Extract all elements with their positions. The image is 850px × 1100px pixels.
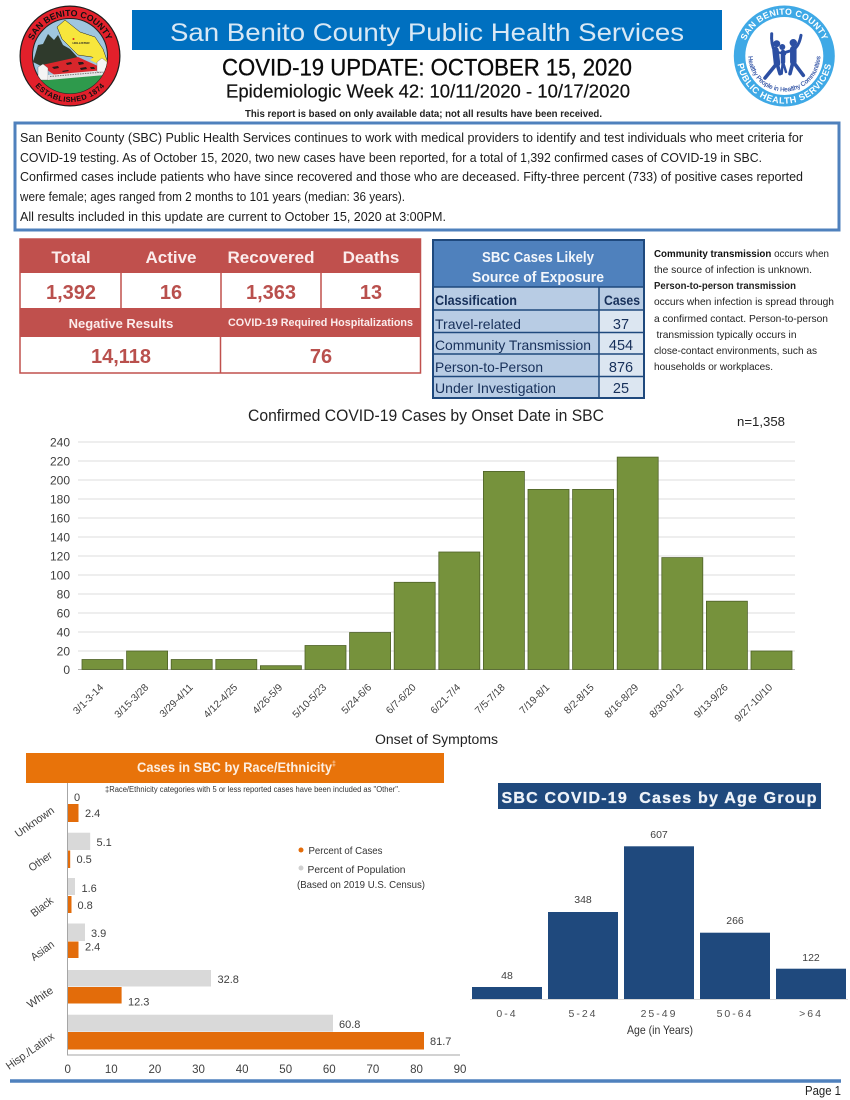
date labels: 9/27-10/10: [733, 682, 775, 725]
table: case totals: 14,118: [91, 346, 151, 368]
axes: [68, 783, 460, 1055]
age labels: >64: [799, 1008, 823, 1020]
date labels: 4/12-4/25: [202, 682, 240, 721]
panel: summary text: COVID-19 testing. As of October 15, 2020, two new cases have been reported, for a total of 1,392 confirmed cases of COVID-19 in SBC.: [20, 150, 762, 165]
axis title: Age (in Years): [627, 1023, 693, 1037]
category labels: White: [25, 985, 56, 1011]
gridlines and y axis labels: 0: [63, 663, 70, 677]
table: likely source of exposure: Cases: [604, 292, 640, 308]
chart header: ‡: [332, 761, 336, 768]
gridlines and y axis labels: 240: [50, 436, 70, 450]
chart: cases by age group: [470, 783, 848, 1037]
x axis ticks: 70: [367, 1064, 379, 1076]
x axis ticks: 50: [279, 1064, 292, 1076]
page number: Page 1: [805, 1084, 841, 1098]
table: likely source of exposure: Travel-related: [435, 316, 521, 332]
value labels: 32.8: [218, 974, 239, 986]
age labels: [496, 1008, 823, 1020]
gridlines and y axis labels: 40: [57, 626, 70, 640]
date labels: 3/1-3-14: [72, 682, 106, 717]
table: case totals: Negative Results: [69, 316, 173, 331]
value labels: 2.4: [85, 808, 100, 820]
table: likely source of exposure: Source of Exposure: [472, 270, 604, 286]
value labels: 48: [501, 970, 513, 982]
date labels: 3/15-3/28: [113, 682, 151, 721]
category labels: Hisp./Latinx: [4, 1030, 57, 1073]
table: case totals: 76: [310, 346, 332, 368]
x axis ticks: 80: [410, 1064, 423, 1076]
gridlines and y axis labels: [50, 436, 795, 677]
table: likely source of exposure: SBC Cases Likely: [482, 250, 594, 266]
text block: transmission definitions: close-contact environments, such as: [654, 345, 817, 357]
table: likely source of exposure: 876: [609, 360, 633, 376]
title: COVID-19 update date: COVID-19 UPDATE: OCTOBER 15, 2020: [222, 54, 632, 82]
gridlines and y axis labels: 20: [57, 644, 70, 658]
legend: (Based on 2019 U.S. Census): [297, 879, 425, 891]
table: case totals: COVID-19 Required Hospitalizations: [228, 317, 413, 329]
date labels: 6/7-6/20: [384, 682, 419, 717]
legend: Percent of Population: [308, 864, 406, 876]
chart title: Confirmed COVID-19 Cases by Onset Date in SBC: [248, 407, 604, 425]
text block: transmission definitions: Person-to-person transmission: [654, 280, 796, 292]
table: likely source of exposure: Person-to-Person: [435, 359, 543, 375]
date labels: 8/2-8/15: [562, 682, 597, 717]
icon: San Benito County seal: [20, 6, 120, 106]
table: likely source of exposure: 454: [609, 338, 633, 354]
value labels: 607: [650, 829, 668, 841]
age labels: 50-64: [717, 1008, 753, 1020]
text block: transmission definitions: households or workplaces.: [654, 361, 773, 373]
value labels: 5.1: [96, 837, 112, 849]
panel: summary text: [15, 123, 839, 230]
x axis ticks: 30: [192, 1064, 205, 1076]
gridlines and y axis labels: 140: [50, 530, 70, 544]
date labels: 9/13-9/26: [692, 682, 731, 721]
table: case totals: 1,392: [46, 282, 96, 304]
bars: [472, 846, 846, 999]
table: likely source of exposure: 37: [613, 317, 629, 333]
icon: Public Health Services logo: Healthy People in Healthy Communities: [748, 56, 820, 92]
date labels: 7/19-8/1: [518, 682, 552, 717]
date labels: 8/16-8/29: [603, 682, 641, 721]
gridlines and y axis labels: 100: [50, 568, 70, 582]
age labels: 5-24: [568, 1008, 598, 1020]
table: case totals: Deaths: [343, 248, 399, 267]
footnote: ‡Race/Ethnicity categories with 5 or less reported cases have been included as "Other".: [105, 785, 400, 794]
table: case totals: 16: [160, 282, 182, 304]
gridlines and y axis labels: 220: [50, 454, 70, 468]
table: case totals: Recovered: [228, 248, 314, 267]
axis title: Onset of Symptoms: [375, 732, 498, 747]
gridlines and y axis labels: 200: [50, 474, 70, 488]
category labels: Asian: [29, 939, 57, 964]
table: likely source of exposure: Under Investigation: [435, 380, 556, 396]
chart header: Cases in SBC by Race/Ethnicity: [137, 759, 332, 775]
panel: summary text: All results included in this update are current to October 15, 2020 at 3:00PM.: [20, 209, 446, 224]
text block: transmission definitions: occurs when infection is spread through: [654, 296, 834, 308]
value labels: 81.7: [430, 1036, 451, 1048]
icon: San Benito County seal: SAN BENITO COUNTY: [28, 10, 112, 40]
value labels: 2.4: [85, 942, 100, 954]
gridlines and y axis labels: 180: [50, 492, 70, 506]
panel: summary text: were female; ages ranged from 2 months to 101 years (median: 36 years).: [19, 189, 405, 204]
text block: transmission definitions: [654, 248, 834, 373]
value labels: 12.3: [128, 996, 149, 1008]
age labels: 0-4: [496, 1008, 518, 1020]
x axis ticks: 60: [323, 1064, 336, 1076]
x axis ticks: 40: [236, 1064, 248, 1076]
date labels: 5/24-6/6: [340, 682, 374, 717]
panel: summary text: San Benito County (SBC) Public Health Services continues to work with medical providers to identify and test individuals who meet criteria for: [20, 130, 804, 145]
icon: San Benito County seal: HOLLISTER: [72, 41, 90, 45]
category labels: [4, 805, 57, 1073]
icon: San Benito County seal: ESTABLISHED 1874: [35, 82, 104, 102]
category labels: Unknown: [13, 805, 57, 840]
table: likely source of exposure: [433, 240, 644, 398]
note: data availability: This report is based on only available data; not all results have been received.: [245, 109, 602, 120]
x axis ticks: 0: [64, 1064, 71, 1076]
icon: Public Health Services logo: [734, 6, 835, 106]
date labels: 5/10-5/23: [291, 682, 329, 721]
chart: confirmed cases by onset date: [50, 407, 795, 747]
sample size: n=1,358: [737, 414, 785, 429]
date labels: 4/26-5/9: [251, 682, 285, 717]
table: likely source of exposure: 25: [613, 381, 629, 397]
chart: cases by race and ethnicity: [4, 753, 466, 1076]
table: likely source of exposure: Community Transmission: [435, 337, 591, 353]
table: case totals: 1,363: [246, 282, 296, 304]
value labels: 60.8: [339, 1019, 360, 1031]
banner: department title: San Benito County Public Health Services: [170, 19, 684, 47]
gridlines and y axis labels: 80: [57, 588, 70, 602]
table: likely source of exposure: Classification: [435, 292, 517, 308]
chart header: [26, 753, 444, 783]
panel: summary text: Confirmed cases include patients who have since recovered and those who are deceased. Fifty-three percent (733) of positive cases reported: [20, 169, 803, 184]
date labels: [72, 682, 775, 725]
case bars: [68, 804, 424, 1050]
value labels: 3.9: [91, 928, 106, 940]
text block: transmission definitions: transmission typically occurs in: [656, 329, 797, 341]
chart header: SBC COVID-19 Cases by Age Group: [502, 790, 817, 807]
legend: Percent of Cases: [308, 845, 382, 857]
population bars: [68, 833, 333, 1032]
date labels: 8/30-9/12: [648, 682, 686, 721]
value labels: 122: [802, 952, 820, 964]
category labels: Other: [27, 849, 55, 874]
table: case totals: Total: [51, 248, 91, 267]
table: case totals: [20, 239, 420, 373]
date labels: 6/21-7/4: [429, 682, 463, 717]
value labels: 266: [726, 915, 744, 927]
value labels: 348: [574, 894, 592, 906]
banner: department title: [132, 10, 722, 50]
x axis ticks: 90: [454, 1064, 466, 1076]
value labels: 0.8: [78, 900, 93, 912]
icon: Public Health Services logo: SAN BENITO COUNTY: [741, 8, 828, 40]
chart header: [498, 783, 821, 809]
text block: transmission definitions: a confirmed contact. Person-to-person: [654, 313, 828, 325]
x axis ticks: [64, 1064, 466, 1076]
subtitle: epidemiologic week: Epidemiologic Week 42: 10/11/2020 - 10/17/2020: [226, 80, 630, 102]
table: case totals: 13: [360, 282, 382, 304]
x axis ticks: 20: [149, 1064, 161, 1076]
value labels: [74, 792, 451, 1048]
value labels: 1.6: [82, 883, 97, 895]
category labels: Black: [29, 895, 56, 920]
date labels: 3/29-4/11: [158, 682, 196, 720]
text block: transmission definitions: Community transmission occurs when: [654, 248, 829, 260]
gridlines and y axis labels: 60: [57, 606, 70, 620]
value labels: 0: [74, 792, 80, 804]
value labels: [501, 829, 820, 982]
value labels: 0.5: [76, 854, 92, 866]
x axis ticks: 10: [105, 1064, 118, 1076]
text block: transmission definitions: the source of infection is unknown.: [654, 264, 812, 276]
legend: [297, 845, 425, 891]
icon: Public Health Services logo: PUBLIC HEALTH SERVICES: [738, 63, 831, 104]
gridlines and y axis labels: 120: [50, 550, 70, 564]
age labels: 25-49: [641, 1008, 677, 1020]
bars: [82, 457, 792, 670]
table: case totals: Active: [145, 248, 197, 267]
gridlines and y axis labels: 160: [50, 512, 70, 526]
date labels: 7/5-7/18: [473, 682, 508, 717]
